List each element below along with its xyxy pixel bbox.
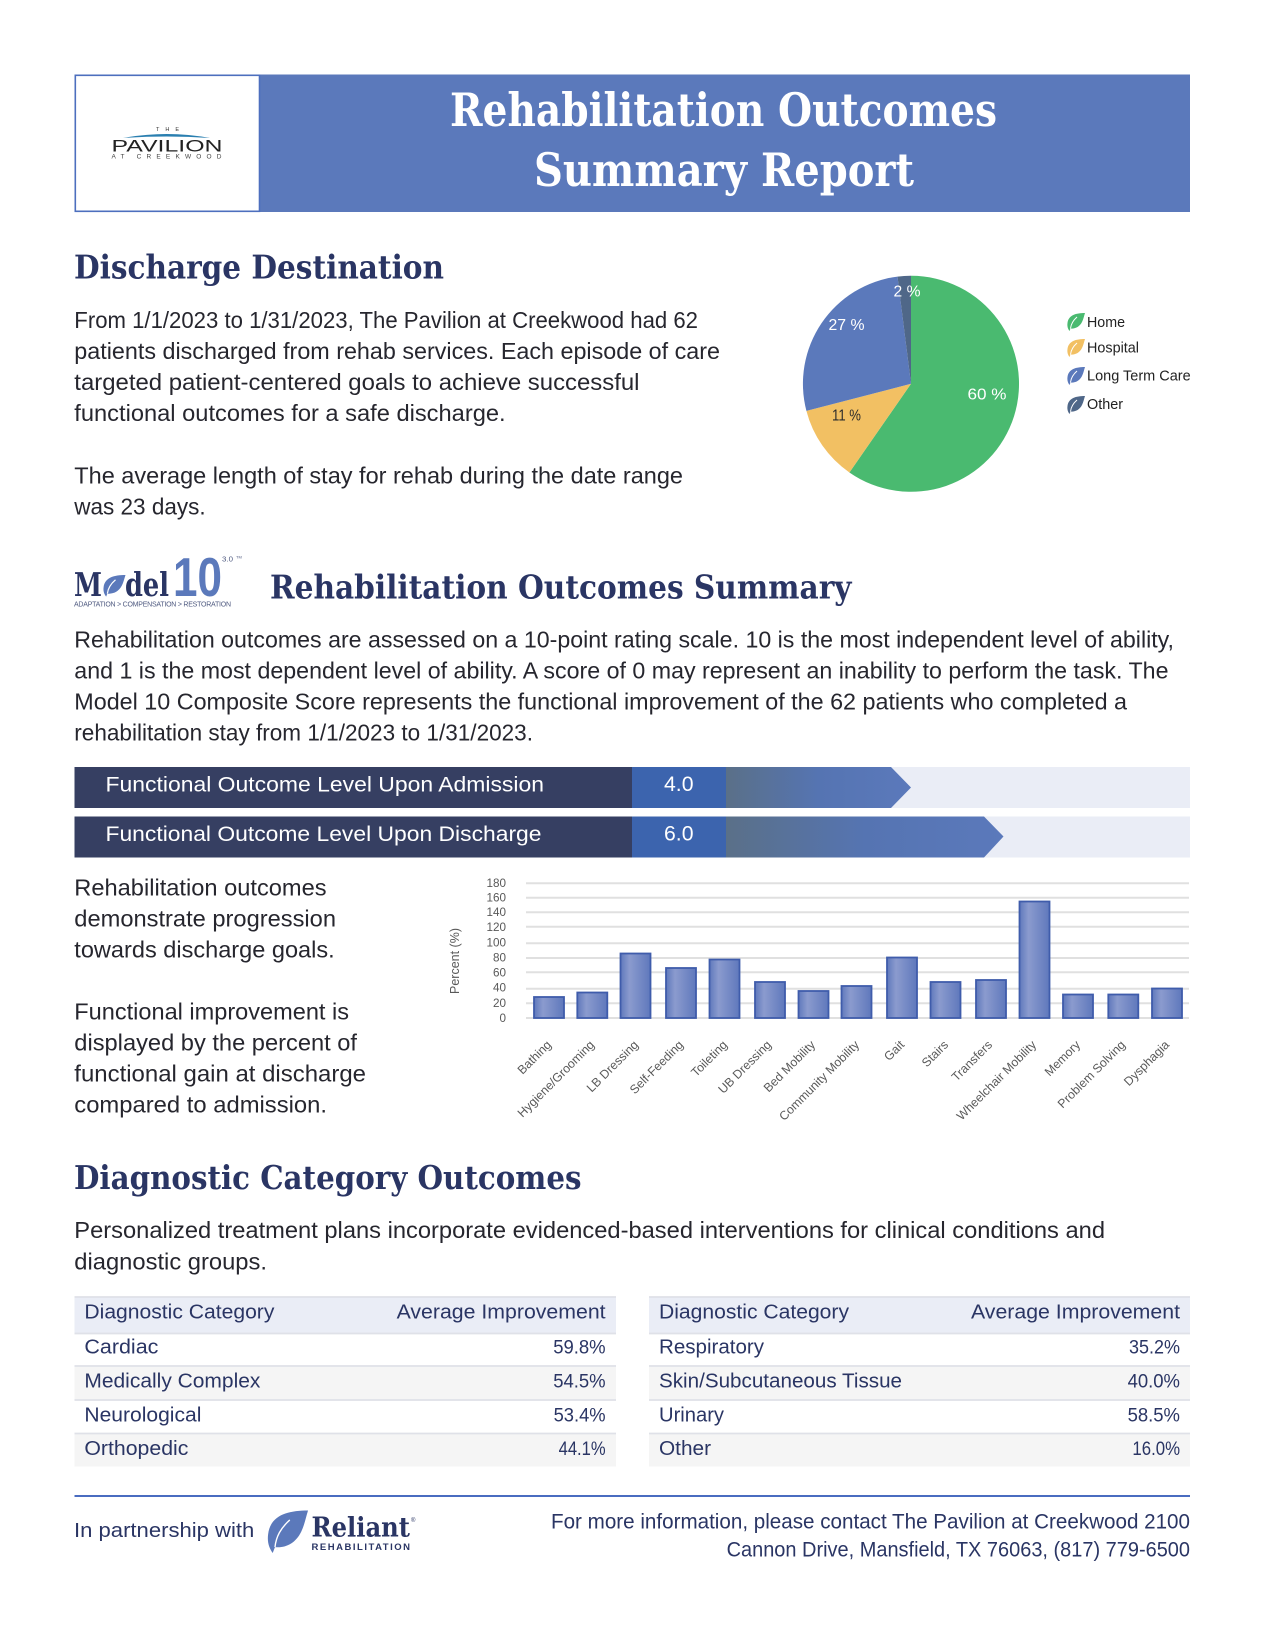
bar: admission outcome level bbox=[74, 767, 1190, 808]
footer: contact information bbox=[551, 1510, 1190, 1562]
pie chart: discharge destination: 27 % bbox=[828, 317, 864, 334]
pie chart: discharge destination: 60 % bbox=[968, 386, 1006, 404]
x axis labels bbox=[515, 1037, 1172, 1123]
legend: pie chart: Long Term Care bbox=[1087, 369, 1191, 385]
table: diagnostic categories left bbox=[74, 1296, 616, 1466]
table: diagnostic categories right: Urinary bbox=[659, 1404, 724, 1426]
x axis labels: UB Dressing bbox=[715, 1038, 774, 1096]
text block: functional improvement: compared to admission. bbox=[74, 1092, 327, 1118]
text block: functional improvement: Functional improvement is bbox=[74, 998, 349, 1024]
y axis labels: 80 bbox=[493, 952, 506, 965]
icon: Reliant leaf bbox=[268, 1510, 308, 1553]
text block: scale explanation: rehabilitation stay from 1/1/2023 to 1/31/2023. bbox=[74, 720, 533, 746]
text block: discharge summary bbox=[73, 307, 720, 520]
table: diagnostic categories right: Diagnostic Category bbox=[659, 1302, 849, 1324]
x axis labels: Wheelchair Mobility bbox=[954, 1037, 1040, 1123]
icon: home leaf bbox=[1067, 313, 1085, 331]
table: diagnostic categories right bbox=[649, 1296, 1190, 1466]
table: diagnostic categories right: Respiratory bbox=[659, 1336, 764, 1358]
table: diagnostic categories left: Diagnostic Category bbox=[84, 1302, 274, 1324]
icon: long term care leaf bbox=[1067, 367, 1085, 385]
text block: functional improvement: functional gain at discharge bbox=[74, 1060, 366, 1086]
table: diagnostic categories left: Cardiac bbox=[84, 1336, 158, 1358]
bar: discharge outcome level: 6.0 bbox=[664, 822, 694, 846]
y axis labels: 120 bbox=[486, 921, 506, 934]
text block: discharge summary: was 23 days. bbox=[73, 494, 206, 520]
x axis labels: Bathing bbox=[515, 1038, 554, 1077]
pie chart: discharge destination: 2 % bbox=[894, 284, 920, 300]
table: diagnostic categories right: 16.0% bbox=[1132, 1439, 1180, 1460]
table: diagnostic categories right: Other bbox=[659, 1438, 711, 1460]
y axis labels: 60 bbox=[493, 967, 506, 980]
logo: Model 10: ADAPTATION > COMPENSATION > RESTORATION bbox=[74, 602, 231, 609]
y axis title: Percent (%) bbox=[448, 928, 462, 994]
footer: partnership: In partnership with bbox=[74, 1519, 254, 1542]
x axis labels: LB Dressing bbox=[584, 1038, 641, 1095]
table: diagnostic categories left: 44.1% bbox=[559, 1439, 606, 1460]
panel: Pavilion logo: PAVILION bbox=[112, 138, 222, 156]
legend: pie chart bbox=[1067, 313, 1191, 414]
logo: Model 10 bbox=[74, 546, 242, 609]
text block: treatment plans: diagnostic groups. bbox=[74, 1248, 267, 1274]
y axis labels: 40 bbox=[493, 982, 506, 995]
panel: Pavilion logo: AT CREEKWOOD bbox=[112, 154, 222, 160]
icon: Model 10 leaf bbox=[103, 575, 126, 597]
logo: Model 10: 10 bbox=[173, 546, 222, 608]
title: Rehabilitation Outcomes bbox=[450, 83, 997, 137]
logo: Model 10: TM bbox=[236, 554, 242, 560]
x axis labels: Community Mobility bbox=[776, 1037, 863, 1123]
logo: Model 10: del bbox=[125, 565, 169, 604]
text block: scale explanation: Rehabilitation outcomes are assessed on a 10-point rating scale. 10 is the most independent level of ability, bbox=[74, 626, 1174, 652]
legend: pie chart: Home bbox=[1087, 315, 1125, 331]
footer: partnership bbox=[74, 1510, 416, 1553]
bar chart: functional gain percent bbox=[448, 877, 1189, 1123]
y axis labels: 20 bbox=[493, 997, 506, 1010]
bar: admission outcome level: 4.0 bbox=[664, 773, 694, 796]
text block: discharge summary: The average length of stay for rehab during the date range bbox=[74, 462, 683, 488]
title bbox=[450, 83, 997, 197]
footer: partnership: REHABILITATION bbox=[312, 1542, 410, 1553]
icon: other leaf bbox=[1067, 396, 1085, 414]
footer: partnership: ® bbox=[411, 1517, 416, 1524]
legend: pie chart: Hospital bbox=[1087, 341, 1139, 357]
bar: discharge outcome level: Functional Outcome Level Upon Discharge bbox=[106, 823, 542, 846]
x axis labels: Stairs bbox=[919, 1038, 951, 1070]
table: diagnostic categories right: Skin/Subcutaneous Tissue bbox=[659, 1370, 902, 1392]
text block: discharge summary: targeted patient-centered goals to achieve successful bbox=[74, 369, 640, 395]
x axis labels: Gait bbox=[881, 1037, 908, 1064]
x axis labels: Self-Feeding bbox=[627, 1038, 686, 1097]
heading: Rehabilitation Outcomes Summary: Rehabilitation Outcomes Summary bbox=[270, 568, 852, 606]
text block: discharge summary: patients discharged from rehab services. Each episode of care bbox=[74, 338, 720, 364]
header banner bbox=[74, 74, 1190, 212]
text block: functional improvement bbox=[74, 874, 366, 1118]
table: diagnostic categories left: Orthopedic bbox=[84, 1438, 188, 1460]
footer: contact information: For more information, please contact The Pavilion at Creekwood 2100 bbox=[551, 1510, 1190, 1534]
text block: functional improvement: displayed by the percent of bbox=[74, 1030, 358, 1056]
x axis labels: Problem Solving bbox=[1055, 1038, 1128, 1111]
y axis labels: 100 bbox=[486, 936, 506, 949]
panel: Pavilion logo: THE bbox=[156, 127, 179, 133]
footer: contact information: Cannon Drive, Mansfield, TX 76063, (817) 779-6500 bbox=[727, 1538, 1190, 1562]
table: diagnostic categories right: 58.5% bbox=[1128, 1406, 1180, 1426]
bar: admission outcome level: Functional Outcome Level Upon Admission bbox=[106, 774, 544, 796]
heading: Diagnostic Category Outcomes: Diagnostic Category Outcomes bbox=[74, 1158, 582, 1197]
bar: discharge outcome level bbox=[74, 816, 1190, 858]
y axis labels: 140 bbox=[486, 906, 506, 919]
x axis labels: Transfers bbox=[949, 1038, 995, 1084]
table: diagnostic categories left: Neurological bbox=[84, 1404, 201, 1426]
text block: scale explanation bbox=[74, 626, 1174, 746]
table: diagnostic categories left: 54.5% bbox=[553, 1372, 606, 1392]
table: diagnostic categories right: 35.2% bbox=[1129, 1338, 1180, 1358]
pie chart: discharge destination: 11 % bbox=[832, 408, 861, 424]
table: diagnostic categories left: 53.4% bbox=[554, 1406, 606, 1426]
table: diagnostic categories left: Average Improvement bbox=[397, 1302, 606, 1324]
y axis labels: 0 bbox=[499, 1012, 506, 1025]
logo: Model 10: 3.0 bbox=[222, 554, 233, 564]
text block: treatment plans bbox=[74, 1217, 1105, 1274]
text block: scale explanation: Model 10 Composite Score represents the functional improvement of the 62 patients who completed a bbox=[74, 688, 1127, 714]
footer: partnership: Reliant bbox=[312, 1513, 410, 1544]
table: diagnostic categories left: Medically Complex bbox=[84, 1370, 260, 1392]
x axis labels: Hygiene/Grooming bbox=[515, 1038, 597, 1120]
text block: functional improvement: Rehabilitation outcomes bbox=[74, 874, 327, 900]
text block: treatment plans: Personalized treatment plans incorporate evidenced-based interventions for clinical conditions and bbox=[74, 1217, 1105, 1243]
text block: functional improvement: towards discharge goals. bbox=[74, 936, 335, 962]
text block: functional improvement: demonstrate progression bbox=[74, 906, 336, 932]
legend: pie chart: Other bbox=[1087, 397, 1123, 413]
panel: Pavilion logo bbox=[75, 75, 260, 211]
pie chart: discharge destination bbox=[803, 276, 1019, 492]
text block: discharge summary: functional outcomes for a safe discharge. bbox=[74, 400, 506, 426]
y axis labels: 160 bbox=[486, 892, 506, 904]
table: diagnostic categories left: 59.8% bbox=[553, 1338, 606, 1358]
x axis labels: Bed Mobility bbox=[761, 1037, 819, 1095]
title: Summary Report bbox=[534, 143, 915, 197]
y axis labels: 180 bbox=[486, 877, 506, 890]
table: diagnostic categories right: Average Improvement bbox=[971, 1302, 1180, 1324]
bars bbox=[534, 902, 1182, 1018]
y axis labels bbox=[486, 877, 506, 1025]
x axis labels: Dysphagia bbox=[1121, 1038, 1172, 1089]
text block: scale explanation: and 1 is the most dependent level of ability. A score of 0 may represent an inability to perform the task. The bbox=[74, 658, 1168, 684]
text block: discharge summary: From 1/1/2023 to 1/31/2023, The Pavilion at Creekwood had 62 bbox=[74, 307, 698, 333]
x axis labels: Toileting bbox=[688, 1038, 730, 1080]
heading: Discharge Destination: Discharge Destination bbox=[74, 248, 444, 286]
table: diagnostic categories right: 40.0% bbox=[1128, 1372, 1180, 1392]
x axis labels: Memory bbox=[1042, 1037, 1084, 1079]
logo: Model 10: M bbox=[74, 565, 102, 604]
icon: hospital leaf bbox=[1067, 339, 1085, 357]
